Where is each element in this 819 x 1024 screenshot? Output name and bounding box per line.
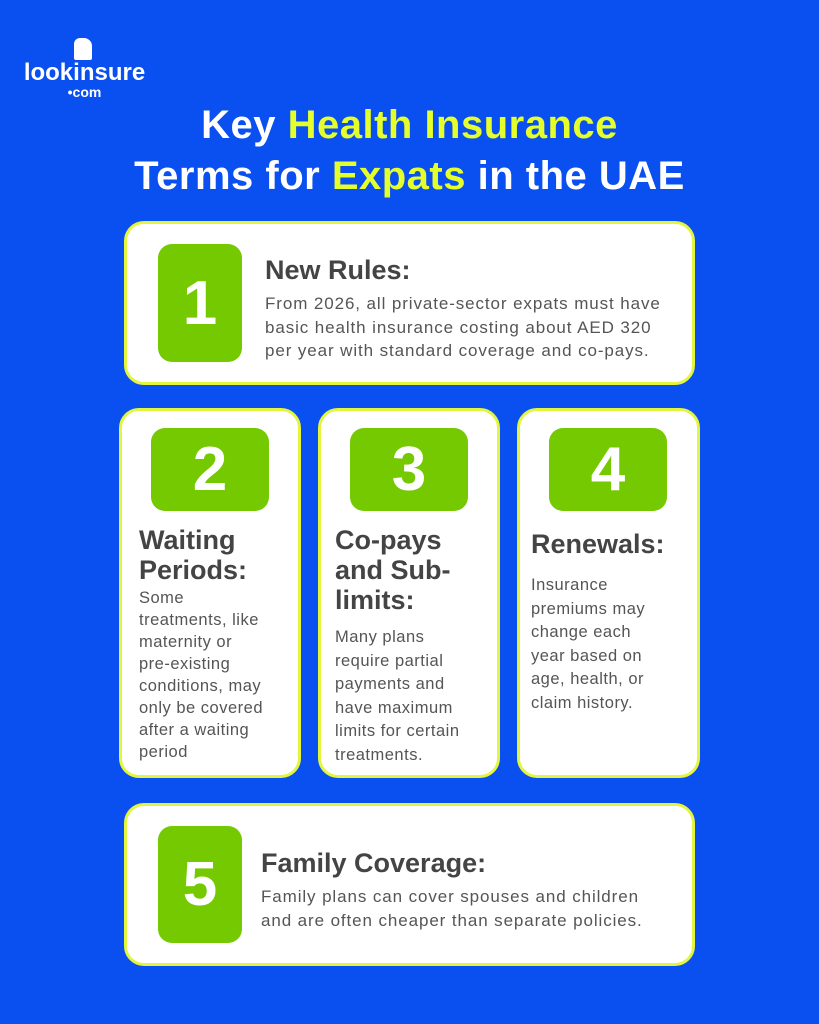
body: premiums may (531, 600, 645, 618)
body: and are often cheaper than separate policies. (261, 910, 643, 930)
panel: 3 copays (318, 408, 500, 778)
body: Many plans (335, 628, 424, 646)
body: maternity or (139, 633, 232, 651)
heading: New Rules: (265, 255, 411, 285)
panel: 1 new rules (124, 221, 695, 385)
icon: dino (74, 38, 92, 60)
body: claim history. (531, 694, 633, 712)
number 3: 3 (392, 435, 426, 504)
body: require partial (335, 652, 443, 670)
number 4: 4 (591, 435, 625, 504)
panel: 5 family (124, 803, 695, 966)
body: Some (139, 589, 184, 607)
heading (335, 525, 450, 615)
number 5 (158, 826, 242, 943)
body: Insurance (531, 576, 608, 594)
title (134, 103, 685, 198)
logo: •com (68, 84, 101, 100)
body: period (139, 743, 188, 761)
body: after a waiting (139, 721, 249, 739)
panel: 2 waiting (119, 408, 301, 778)
title: Key Health Insurance (201, 103, 618, 147)
body: treatments. (335, 746, 423, 764)
body (139, 589, 263, 761)
body (261, 887, 643, 930)
number 1 (158, 244, 242, 362)
body: treatments, like (139, 611, 259, 629)
body: only be covered (139, 699, 263, 717)
body: pre-existing (139, 655, 230, 673)
logo (24, 38, 145, 100)
body: limits for certain (335, 722, 460, 740)
body: age, health, or (531, 670, 644, 688)
heading: Renewals: (531, 529, 665, 559)
body: conditions, may (139, 677, 261, 695)
body: per year with standard coverage and co-pays. (265, 341, 650, 360)
number 4 (549, 428, 667, 511)
body: basic health insurance costing about AED 320 (265, 318, 651, 336)
heading: Co-pays (335, 525, 442, 555)
body: have maximum (335, 698, 453, 716)
body: year based on (531, 646, 642, 664)
body: payments and (335, 675, 445, 693)
panel: 4 renewals (517, 408, 700, 778)
heading: limits: (335, 585, 415, 615)
body (335, 628, 460, 764)
number 1: 1 (183, 268, 217, 338)
heading: Periods: (139, 555, 247, 585)
heading: Family Coverage: (261, 848, 486, 878)
heading: Waiting (139, 525, 235, 555)
body (265, 294, 661, 360)
body: Family plans can cover spouses and children (261, 887, 639, 906)
number 3 (350, 428, 468, 511)
logo text: lookinsure (24, 59, 145, 86)
body: From 2026, all private-sector expats must have (265, 294, 661, 313)
title: Terms for Expats in the UAE (134, 154, 685, 198)
heading (139, 525, 247, 585)
number 2 (151, 428, 269, 511)
heading: and Sub- (335, 555, 450, 585)
number 5: 5 (183, 850, 217, 919)
body (531, 576, 645, 712)
body: change each (531, 623, 631, 641)
number 2: 2 (193, 435, 227, 504)
